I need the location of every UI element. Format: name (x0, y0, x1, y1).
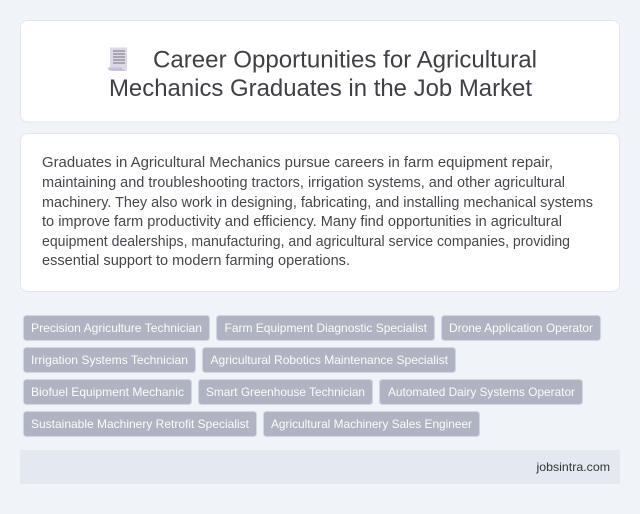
tag: Smart Greenhouse Technician (198, 380, 372, 404)
tag: Sustainable Machinery Retrofit Specialist (24, 412, 256, 436)
tag: Smart Greenhouse Technician: Smart Greenhouse Technician (206, 385, 365, 399)
footer: jobsintra.com (535, 460, 610, 474)
description text (42, 155, 593, 269)
description text: machinery. They also work in designing, fabricating, and installing mechanical systems (42, 195, 593, 211)
description text: essential support to modern farming operations. (42, 253, 350, 269)
tag: Irrigation Systems Technician (24, 348, 196, 372)
description text: to improve farm productivity and efficiency. Many find opportunities in agricultural (42, 214, 562, 230)
title: Mechanics Graduates in the Job Market (109, 75, 532, 102)
tag: Sustainable Machinery Retrofit Specialist: Sustainable Machinery Retrofit Specialist (31, 417, 250, 431)
panel: description (20, 134, 620, 292)
tag: Agricultural Machinery Sales Engineer: Agricultural Machinery Sales Engineer (271, 417, 472, 431)
tag: Farm Equipment Diagnostic Specialist: Farm Equipment Diagnostic Specialist (224, 321, 428, 335)
title (109, 46, 537, 102)
tag: Farm Equipment Diagnostic Specialist (216, 316, 434, 340)
tag: Automated Dairy Systems Operator (380, 380, 582, 404)
tag: Agricultural Robotics Maintenance Specialist (202, 348, 456, 372)
tag: Biofuel Equipment Mechanic (24, 380, 192, 404)
tag: Precision Agriculture Technician (24, 316, 210, 340)
description text: equipment dealerships, manufacturing, and agricultural service companies, providing (42, 234, 570, 250)
tag: Automated Dairy Systems Operator: Automated Dairy Systems Operator (388, 385, 575, 399)
description text: maintaining and troubleshooting tractors, irrigation systems, and other agricultural (42, 175, 565, 191)
tag: Precision Agriculture Technician: Precision Agriculture Technician (31, 321, 202, 335)
footer (20, 450, 620, 484)
panel: title header (20, 20, 620, 122)
tag: Drone Application Operator (442, 316, 600, 340)
tag: Agricultural Machinery Sales Engineer (264, 412, 480, 436)
tag: Drone Application Operator: Drone Application Operator (449, 321, 593, 335)
tag: Agricultural Robotics Maintenance Specialist: Agricultural Robotics Maintenance Specialist (210, 353, 449, 367)
icon: scroll document (108, 48, 127, 71)
tag: Irrigation Systems Technician: Irrigation Systems Technician (31, 353, 188, 367)
career tags (24, 316, 600, 436)
description text: Graduates in Agricultural Mechanics pursue careers in farm equipment repair, (42, 155, 553, 171)
title: Career Opportunities for Agricultural (153, 46, 537, 74)
tag: Biofuel Equipment Mechanic: Biofuel Equipment Mechanic (31, 385, 184, 399)
